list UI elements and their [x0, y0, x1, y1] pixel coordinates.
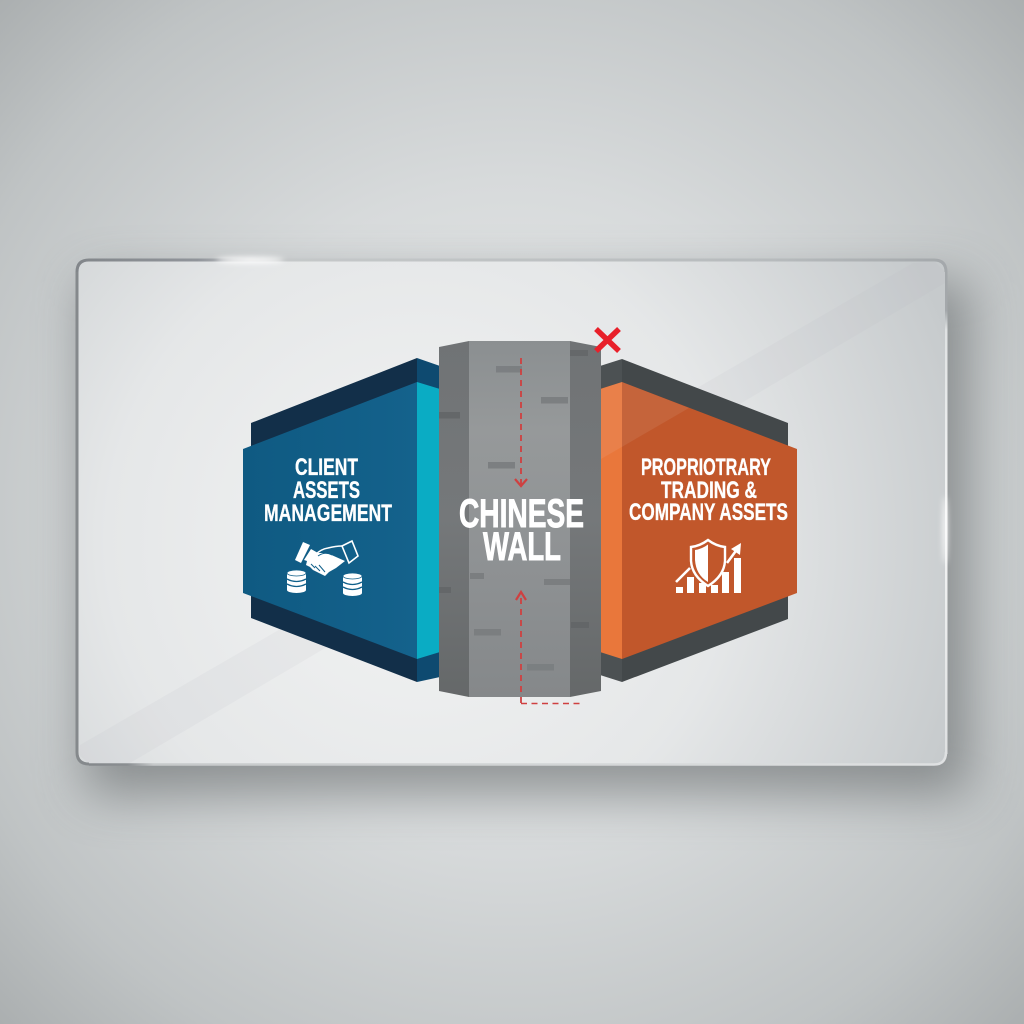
panel: proprietary trading and company assets [600, 359, 797, 682]
arrow up [516, 592, 526, 703]
icon: red cross [596, 329, 619, 351]
block side dark [600, 359, 622, 682]
trend line left [676, 568, 690, 582]
heading: client assets management: CLIENT [295, 454, 358, 481]
hands [304, 549, 345, 576]
glare: right edge [943, 496, 947, 564]
dashed base line [521, 702, 581, 704]
icon: shield and rising bars [676, 540, 741, 593]
icon: handshake and coins [287, 541, 362, 596]
block side orange [600, 382, 622, 659]
title: chinese wall: CHINESE [459, 492, 584, 536]
panel top edge [77, 260, 946, 272]
panel surface [76, 259, 947, 765]
glare: top edge [216, 257, 284, 263]
wall left face [439, 341, 469, 697]
heading: client assets management: ASSETS [293, 477, 360, 504]
block side cyan [417, 382, 440, 659]
shield outline [691, 540, 725, 586]
wall centre face [469, 341, 570, 697]
glass reflection on orange block [601, 382, 689, 459]
chinese wall column [439, 341, 601, 704]
heading: client assets management [264, 454, 392, 527]
arrow down [515, 358, 527, 486]
panel left edge [77, 272, 89, 764]
finger gaps [311, 553, 332, 572]
block back [622, 359, 788, 682]
wall right face [570, 341, 601, 697]
block front [243, 382, 417, 659]
title: chinese wall: WALL [483, 525, 561, 569]
block front [622, 382, 797, 659]
bars [676, 558, 741, 593]
heading: proprietary trading and company assets: COMPANY ASSETS [629, 499, 788, 526]
panel bottom edge [89, 752, 946, 764]
block side dark [417, 358, 440, 682]
glass panel [76, 259, 970, 795]
trend arrow right [727, 548, 738, 563]
title: chinese wall [459, 492, 584, 569]
wall bricks [439, 350, 589, 670]
coins left [287, 570, 306, 593]
panel: client assets management [243, 358, 440, 682]
heading: proprietary trading and company assets: TRADING & [661, 477, 757, 504]
block back [251, 358, 417, 682]
shield half [695, 544, 708, 582]
heading: client assets management: MANAGEMENT [264, 500, 392, 527]
right cuff [342, 541, 358, 563]
heading: proprietary trading and company assets [629, 454, 788, 526]
panel shadow [85, 280, 970, 795]
arrow head [731, 543, 741, 555]
upper hand outline [315, 546, 342, 555]
glass reflection band [79, 262, 945, 763]
left cuff [295, 542, 310, 563]
panel right edge [945, 272, 948, 754]
heading: proprietary trading and company assets: PROPRIOTRARY [641, 454, 771, 481]
coins right [343, 573, 362, 596]
